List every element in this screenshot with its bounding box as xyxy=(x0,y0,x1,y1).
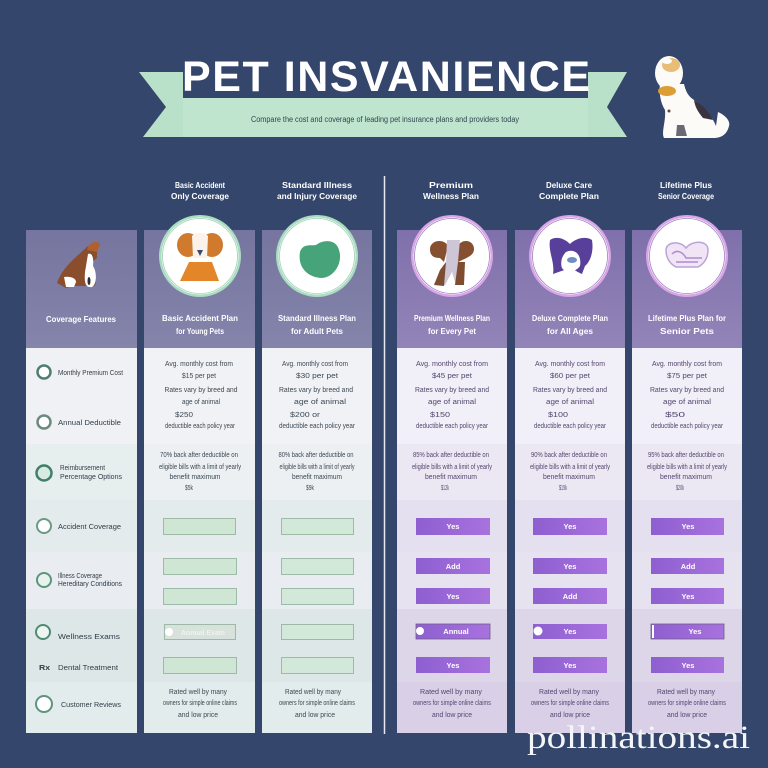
row header label: Coverage Features xyxy=(46,315,117,324)
icon: beagle xyxy=(57,242,100,288)
plan label: Basic Accident Plan xyxy=(162,314,238,323)
review text: and low price xyxy=(550,712,590,719)
row 5 label: Hereditary Conditions xyxy=(58,579,122,588)
cost text: Rates vary by breed and xyxy=(279,387,353,394)
reimbursement text xyxy=(159,452,241,492)
review text xyxy=(648,689,726,719)
cost text: deductible each policy year xyxy=(651,423,724,430)
icon: spaniel badge xyxy=(159,215,241,297)
column heading 4: Wellness Plan xyxy=(423,192,479,201)
review text xyxy=(413,689,491,719)
panel: row labels xyxy=(26,230,137,733)
feature bars: Annual Exam xyxy=(181,630,225,637)
feature bars: Add xyxy=(681,562,696,571)
column heading 4: Premium xyxy=(429,181,473,190)
cost text: Rates vary by breed and xyxy=(533,387,607,394)
review text: owners for simple online claims xyxy=(279,700,355,707)
cost text: Avg. monthly cost from xyxy=(165,361,233,368)
feature bars xyxy=(282,518,354,674)
reimbursement text: 85% back after deductible on xyxy=(413,452,489,459)
cost text: Rates vary by breed and xyxy=(415,387,489,394)
icon: green badge xyxy=(276,215,358,297)
review text: and low price xyxy=(667,712,707,719)
row 8 label xyxy=(36,696,121,712)
reimbursement text: $9k xyxy=(306,485,314,492)
cost text: age of animal xyxy=(294,399,347,406)
review text: owners for simple online claims xyxy=(413,700,491,707)
icon: purple dog badge xyxy=(529,215,611,297)
plan label xyxy=(648,314,726,336)
feature bars xyxy=(651,518,724,673)
watermark: pollinations.ai xyxy=(527,720,750,756)
cost text: deductible each policy year xyxy=(416,423,489,430)
feature bars xyxy=(533,518,607,673)
panel: plan 3 xyxy=(262,215,372,733)
plan label: for Young Pets xyxy=(176,327,224,336)
feature bars: Annual xyxy=(443,627,469,636)
plan label: for Every Pet xyxy=(428,327,476,336)
plan label: Standard Illness Plan xyxy=(278,314,356,323)
reimbursement text: 80% back after deductible on xyxy=(278,452,354,459)
panel: plan 4 xyxy=(397,215,507,733)
review text xyxy=(163,689,237,719)
cost text: age of animal xyxy=(182,399,220,406)
plan label: Deluxe Complete Plan xyxy=(532,314,608,323)
cost text: Avg. monthly cost from xyxy=(535,361,605,368)
feature bars: Yes xyxy=(447,661,459,670)
row 6 label: Wellness Exams xyxy=(58,632,120,641)
row 1 label: Monthly Premium Cost xyxy=(58,368,124,377)
cost text: age of animal xyxy=(428,399,477,406)
icon: sitting dog xyxy=(655,56,729,138)
row 7 label: Dental Treatment xyxy=(58,663,119,672)
feature bars: Yes xyxy=(447,592,459,601)
column heading 6: Lifetime Plus xyxy=(660,181,713,190)
icon: brown dog badge xyxy=(411,215,493,297)
panel: plan 2 xyxy=(144,215,255,733)
plan label xyxy=(278,314,356,336)
plan label: Senior Pets xyxy=(660,327,715,336)
reimbursement text xyxy=(412,452,492,492)
feature bars: Yes xyxy=(689,627,701,636)
review text xyxy=(279,689,355,719)
reimbursement text: $5k xyxy=(185,485,193,492)
feature bars: Yes xyxy=(682,522,694,531)
row 5 label: Illness Coverage xyxy=(58,571,102,580)
feature bars xyxy=(164,518,236,674)
feature bars: Yes xyxy=(682,661,694,670)
row 5 label xyxy=(37,571,122,588)
review text: Rated well by many xyxy=(539,689,599,696)
cost text: Avg. monthly cost from xyxy=(282,361,348,368)
cost text xyxy=(164,361,238,430)
cost text: age of animal xyxy=(546,399,595,406)
cost text: $150 xyxy=(430,412,450,419)
reimbursement text: benefit maximum xyxy=(660,474,712,481)
cost text: Rates vary by breed and xyxy=(650,387,724,394)
reimbursement text: benefit maximum xyxy=(292,474,342,481)
reimbursement text: 90% back after deductible on xyxy=(531,452,607,459)
review text: Rated well by many xyxy=(657,689,715,696)
panel: plan 5 xyxy=(515,215,625,733)
reimbursement text xyxy=(530,452,610,492)
title ribbon xyxy=(139,72,627,137)
plan label xyxy=(532,314,608,336)
reimbursement text: 95% back after deductible on xyxy=(648,452,724,459)
reimbursement text: benefit maximum xyxy=(543,474,595,481)
review text xyxy=(531,689,609,719)
row 2 label: Annual Deductible xyxy=(58,418,121,427)
subtitle: Compare the cost and coverage of leading pet insurance plans and providers today xyxy=(251,115,519,124)
row 3 label: Percentage Options xyxy=(60,472,122,481)
plan label: for All Ages xyxy=(547,327,594,336)
cost text: deductible each policy year xyxy=(534,423,607,430)
cost text: $100 xyxy=(548,412,568,419)
column heading 2 xyxy=(171,181,230,201)
cost text: $250 xyxy=(175,412,193,419)
row 2 label xyxy=(38,416,121,428)
column heading 6 xyxy=(658,181,714,201)
reimbursement text: eligible bills with a limit of yearly xyxy=(530,464,610,471)
reimbursement text xyxy=(278,452,355,492)
feature bars: Yes xyxy=(564,661,576,670)
row 3 label: Reimbursement xyxy=(60,463,106,472)
reimbursement text: benefit maximum xyxy=(425,474,477,481)
review text: owners for simple online claims xyxy=(531,700,609,707)
reimbursement text: $12k xyxy=(441,485,449,492)
review text: Rated well by many xyxy=(285,689,341,696)
review text: and low price xyxy=(295,712,335,719)
reimbursement text xyxy=(647,452,727,492)
cost text xyxy=(650,361,724,430)
column heading 5 xyxy=(539,181,599,201)
cost text: $45 per pet xyxy=(432,373,472,380)
cost text: $75 per pet xyxy=(667,373,707,380)
reimbursement text: eligible bills with a limit of yearly xyxy=(280,464,355,471)
review text: Rated well by many xyxy=(169,689,227,696)
feature bars: Yes xyxy=(564,562,576,571)
row 1 label xyxy=(38,366,124,378)
column heading 3: and Injury Coverage xyxy=(277,192,358,201)
review text: owners for simple online claims xyxy=(163,700,237,707)
feature bars xyxy=(416,518,490,673)
review text: and low price xyxy=(178,712,218,719)
plan label: Lifetime Plus Plan for xyxy=(648,314,726,323)
row 3 label xyxy=(36,463,122,481)
column heading 4 xyxy=(423,181,479,201)
reimbursement text: eligible bills with a limit of yearly xyxy=(647,464,727,471)
row 7 label: Rx xyxy=(39,663,51,672)
review text: and low price xyxy=(432,712,472,719)
reimbursement text: $15k xyxy=(559,485,567,492)
feature bars: Yes xyxy=(564,522,576,531)
review text: Rated well by many xyxy=(420,689,482,696)
reimbursement text: benefit maximum xyxy=(170,474,221,481)
column heading 2: Basic Accident xyxy=(175,181,225,190)
column heading 5: Deluxe Care xyxy=(546,181,593,190)
feature bars: Yes xyxy=(682,592,694,601)
cost text: age of animal xyxy=(663,399,712,406)
column heading 6: Senior Coverage xyxy=(658,192,714,201)
column heading 3 xyxy=(277,181,358,201)
cost text: $15 per pet xyxy=(182,373,216,380)
cost text: deductible each policy year xyxy=(165,423,236,430)
cost text: deductible each policy year xyxy=(279,423,356,430)
feature bars: Add xyxy=(446,562,461,571)
cost text: Avg. monthly cost from xyxy=(416,361,488,368)
reimbursement text: eligible bills with a limit of yearly xyxy=(159,464,241,471)
divider xyxy=(384,176,386,734)
cost text: $200 or xyxy=(290,412,321,419)
reimbursement text: 70% back after deductible on xyxy=(160,452,238,459)
cost text: $30 per pet xyxy=(296,373,338,380)
review text: owners for simple online claims xyxy=(648,700,726,707)
feature bars: Add xyxy=(563,592,578,601)
reimbursement text: eligible bills with a limit of yearly xyxy=(412,464,492,471)
cost text xyxy=(533,361,607,430)
column heading 3: Standard Illness xyxy=(282,181,353,190)
plan label: Premium Wellness Plan xyxy=(414,314,490,323)
cost text xyxy=(415,361,489,430)
plan label xyxy=(162,314,238,336)
row 8 label: Customer Reviews xyxy=(61,700,121,709)
feature bars: Yes xyxy=(564,627,576,636)
feature bars: Yes xyxy=(447,522,459,531)
icon: outlined pet badge xyxy=(646,215,728,297)
cost text: Avg. monthly cost from xyxy=(652,361,722,368)
panel: plan 6 xyxy=(632,215,742,733)
row 4 label xyxy=(37,519,121,533)
cost text: Rates vary by breed and xyxy=(164,387,238,394)
column heading 2: Only Coverage xyxy=(171,192,230,201)
cost text xyxy=(279,361,356,430)
row 4 label: Accident Coverage xyxy=(58,522,121,531)
plan label: for Adult Pets xyxy=(291,327,344,336)
row 6 label xyxy=(36,625,120,641)
plan label xyxy=(414,314,490,336)
cost text: $50 xyxy=(665,412,685,419)
cost text: $60 per pet xyxy=(550,373,590,380)
reimbursement text: $20k xyxy=(676,485,684,492)
title: PET INSVANIENCE xyxy=(182,53,590,101)
column heading 5: Complete Plan xyxy=(539,192,599,201)
